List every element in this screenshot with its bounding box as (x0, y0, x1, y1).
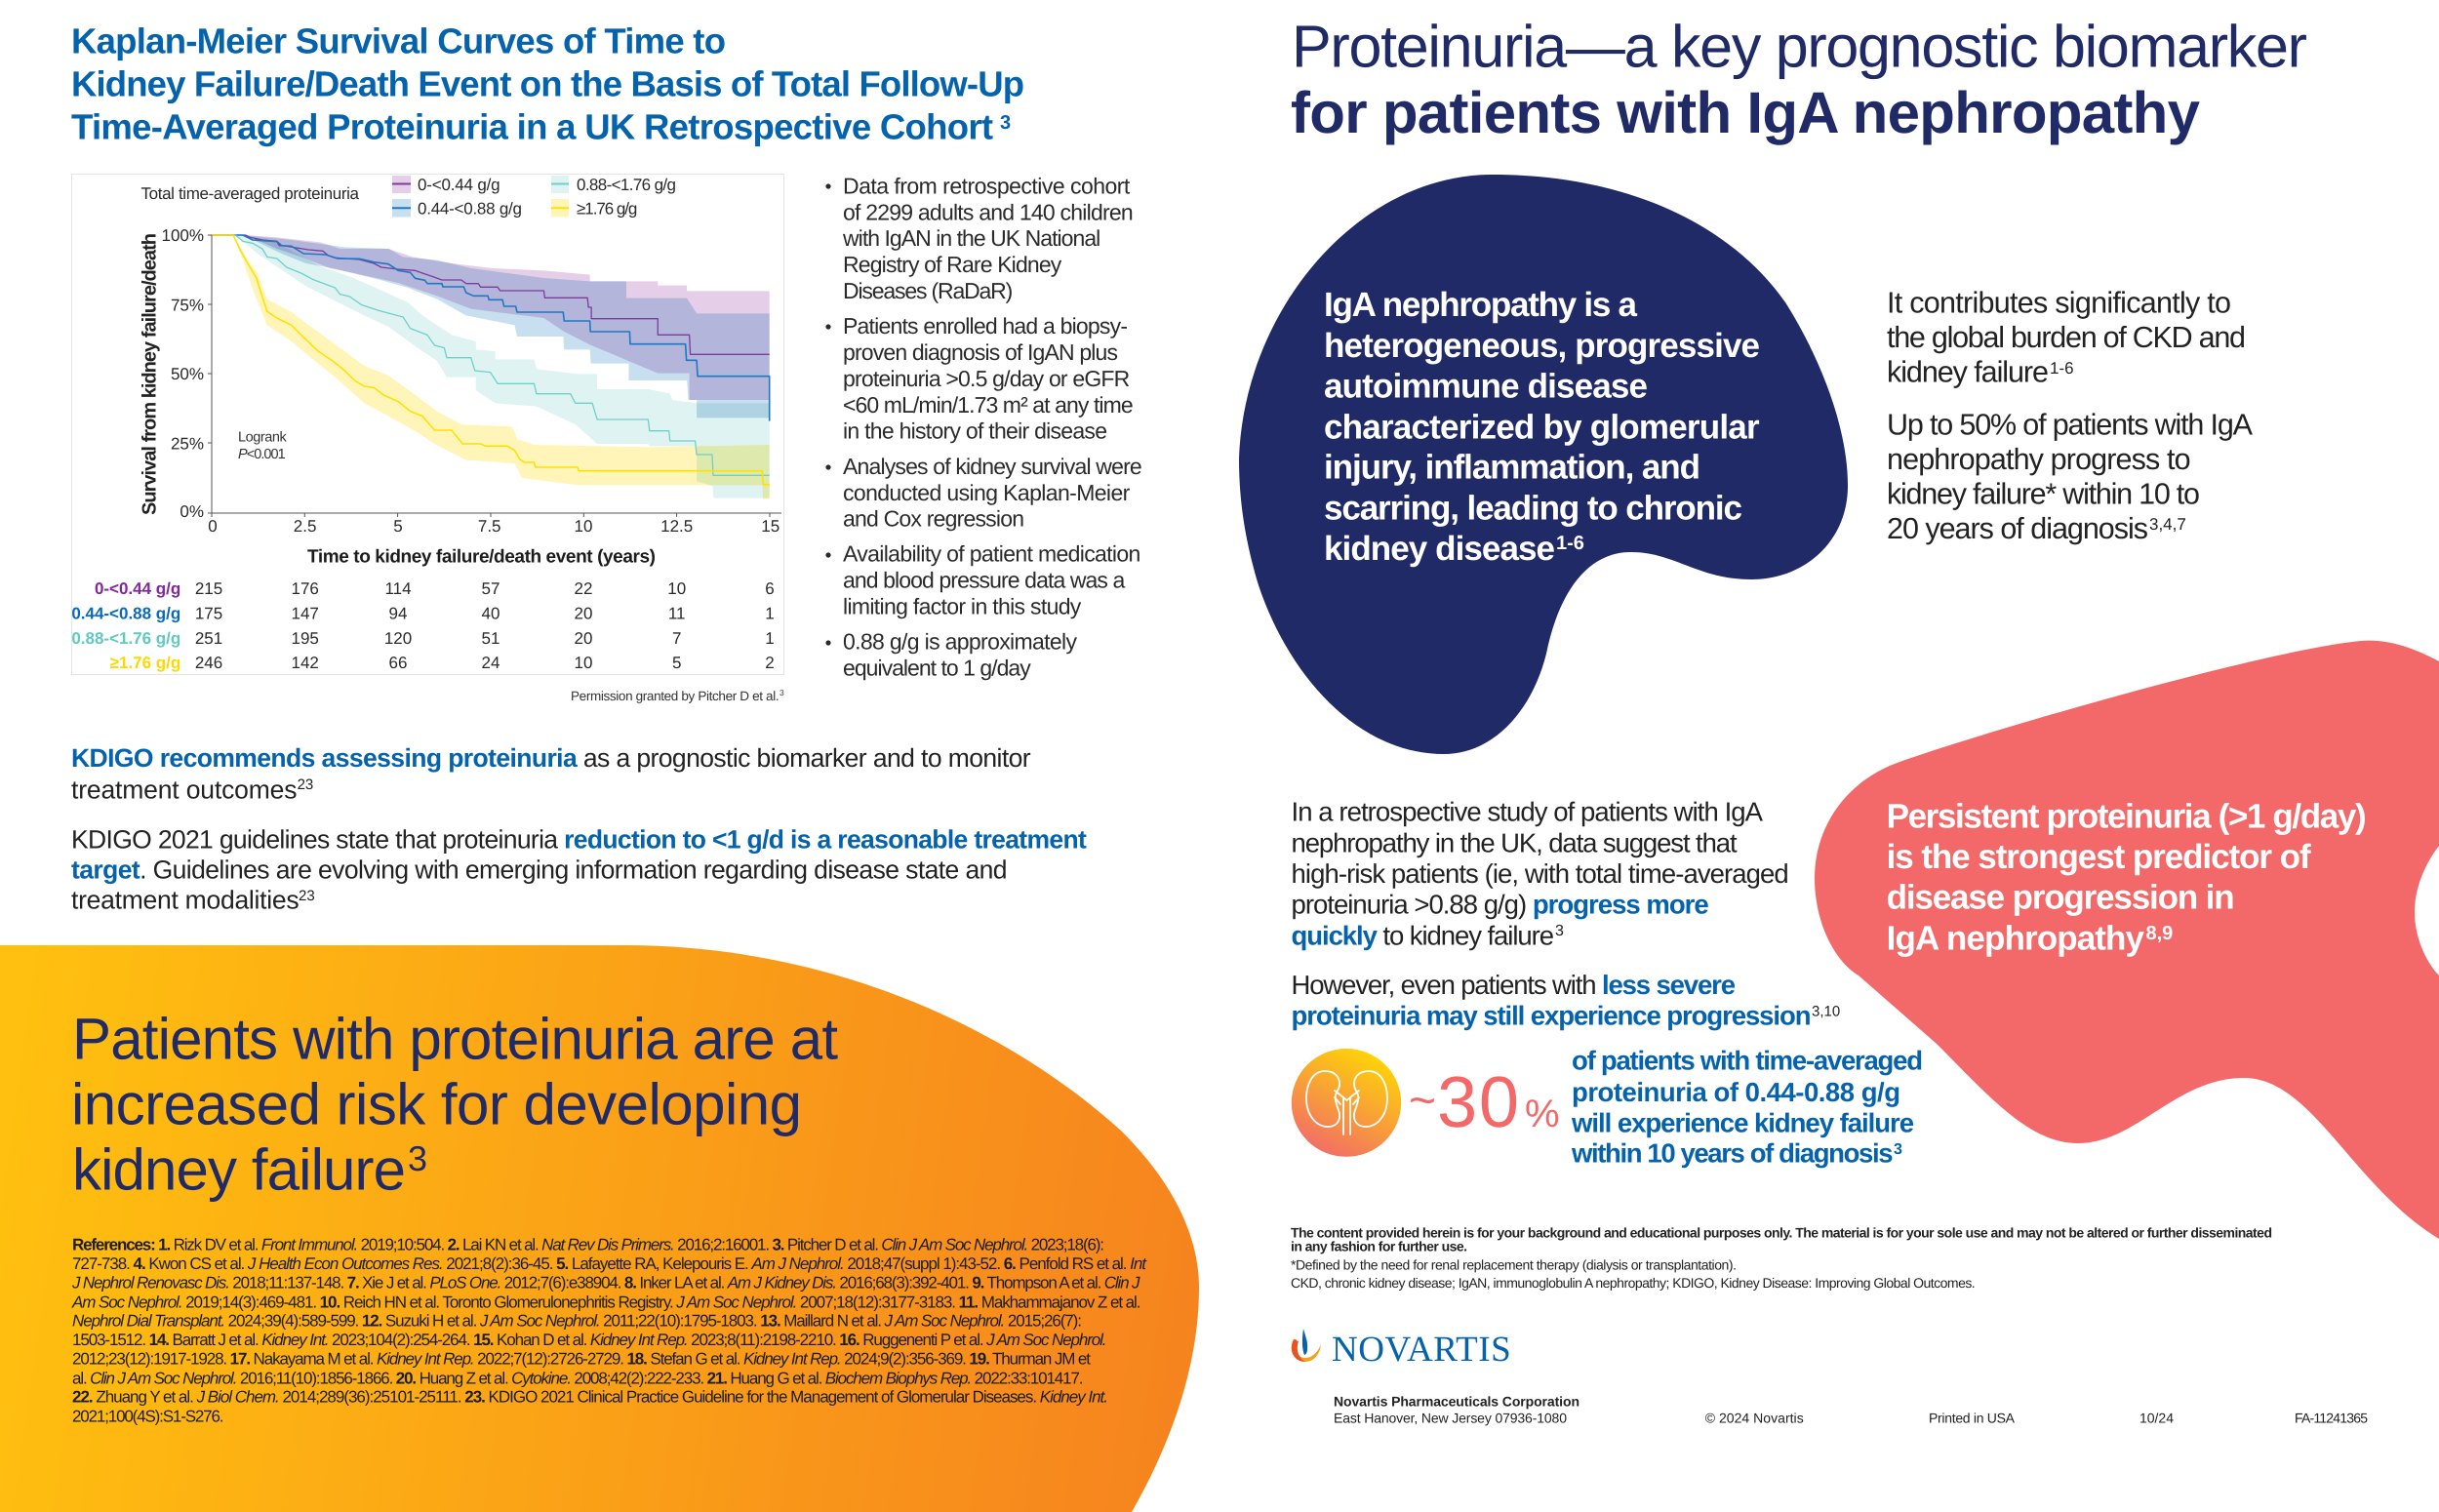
patients at risk table: 175 (195, 605, 222, 623)
patients at risk table: 114 (384, 579, 412, 598)
references: 727-738. 4. Kwon CS et al. J Health Econ Outcomes Res. 2021;8(2):36-45. 5. Lafayette RA, Kelepouris E. Am J Nephrol. 2018;47(suppl 1):43-52. 6. Penfold RS et al. Int (72, 1254, 1147, 1273)
text block: KDIGO recommendation: 23 (299, 888, 315, 904)
stat description: proteinuria of 0.44-0.88 g/g (1572, 1077, 1900, 1107)
bullet list: study details: Availability of patient medication (843, 540, 1140, 566)
stat description: of patients with time-averaged (1572, 1046, 1923, 1076)
references: 22. Zhuang Y et al. J Biol Chem. 2014;289(36):25101-25111. 23. KDIGO 2021 Clinical Practice Guideline for the Management of Glomerular Diseases. Kidney Int. (72, 1388, 1108, 1407)
logrank annotation: Logrank (238, 430, 287, 446)
footer imprint: East Hanover, New Jersey 07936-1080 (1334, 1410, 1567, 1425)
x-axis labels: 15 (761, 517, 780, 536)
text block: retrospective study (1292, 797, 1840, 1031)
stat description: will experience kidney failure (1571, 1108, 1914, 1138)
logo: Novartis: NOVARTIS (1332, 1330, 1511, 1370)
y-axis labels: 0% (180, 502, 204, 521)
patients at risk table: 0.88-<1.76 g/g (71, 629, 180, 648)
title: Kaplan-Meier chart heading: Kaplan-Meier Survival Curves of Time to (71, 20, 726, 60)
stat number (1409, 1061, 1560, 1142)
heading: patients with proteinuria (71, 1007, 838, 1202)
chart legend: 0.88-<1.76 g/g (577, 176, 676, 194)
callout: IgA nephropathy definition: injury, inflammation, and (1324, 449, 1700, 487)
text block: KDIGO recommendation: KDIGO 2021 guidelines state that proteinuria reduction to <1 g/d is a reasonable treatment (71, 824, 1087, 854)
permission note: Permission granted by Pitcher D et al. (571, 689, 780, 703)
references: References: 1. Rizk DV et al. Front Immunol. 2019;10:504. 2. Lai KN et al. Nat Rev Dis Primers. 2016;2:16001. 3. Pitcher D et al. Clin J Am Soc Nephrol. 2023;18(6): (72, 1236, 1104, 1254)
patients at risk table: 22 (575, 579, 592, 598)
curve: teal 0.88-<1.76 g/g (212, 235, 770, 475)
text block: retrospective study: proteinuria may still experience progression (1292, 1001, 1811, 1031)
survival curves plot (212, 235, 770, 499)
text block: retrospective study: 3 (1555, 923, 1564, 939)
text block: global burden: nephropathy progress to (1887, 443, 2191, 476)
curve: blue 0.44-<0.88 g/g (212, 235, 770, 421)
y-axis labels: 25% (171, 435, 204, 454)
disclaimer and footnotes (1291, 1224, 2272, 1291)
bullet list: study details: Data from retrospective cohort (843, 173, 1131, 198)
text block: global burden: It contributes significantly to (1887, 287, 2231, 320)
references: 1503-1512. 14. Barratt J et al. Kidney Int. 2023;104(2):254-264. 15. Kohan D et al. Kidney Int Rep. 2023;8(11):2198-2210. 16. Ruggenenti P et al. J Am Soc Nephrol. (72, 1331, 1106, 1349)
text block: KDIGO recommendation: KDIGO recommends assessing proteinuria as a prognostic biomarker and to monitor (71, 743, 1031, 773)
bullet list: study details: proteinuria >0.5 g/day or eGFR (843, 366, 1130, 391)
x-axis labels (208, 517, 780, 536)
heading: patients with proteinuria: Patients with proteinuria are at (72, 1007, 838, 1072)
patients at risk table: 20 (575, 605, 592, 623)
callout: IgA nephropathy definition: heterogeneous, progressive (1324, 327, 1760, 365)
patients at risk table: 246 (195, 654, 222, 672)
callout: persistent proteinuria: 8,9 (2146, 923, 2173, 944)
patients at risk table: 94 (389, 605, 407, 623)
patients at risk table: ≥1.76 g/g (110, 654, 180, 672)
stat: ~30% of patients (1292, 1046, 1923, 1169)
patients at risk table: 251 (195, 629, 222, 648)
patients at risk table: 11 (668, 605, 686, 623)
bullet list: study details: of 2299 adults and 140 children (843, 199, 1134, 224)
patients at risk table: 0.44-<0.88 g/g (71, 605, 180, 623)
stat number: 30 (1437, 1061, 1519, 1142)
title: Kaplan-Meier chart heading (71, 20, 1024, 147)
disclaimer and footnotes: CKD, chronic kidney disease; IgAN, immunoglobulin A nephropathy; KDIGO, Kidney Disease: Improving Global Outcomes. (1291, 1275, 1976, 1291)
chart legend: 0-<0.44 g/g (418, 176, 500, 194)
confidence band: teal (236, 235, 770, 498)
title: Proteinuria key prognostic biomarker: Proteinuria—a key prognostic biomarker (1292, 13, 2307, 79)
patients at risk table: 176 (292, 579, 319, 598)
patients at risk table: 2 (765, 654, 775, 672)
footer imprint (1334, 1394, 2368, 1425)
stat number: ~ (1409, 1075, 1436, 1127)
callout: IgA nephropathy definition: 1-6 (1556, 533, 1584, 554)
shape: orange background panel (0, 945, 1199, 1512)
title: Kaplan-Meier chart heading: Time-Averaged Proteinuria in a UK Retrospective Cohort (71, 107, 993, 147)
patients at risk table: 51 (482, 629, 500, 648)
x-axis labels: 5 (393, 517, 403, 536)
patients at risk table: 57 (482, 579, 500, 598)
title: Kaplan-Meier chart heading: 3 (1000, 112, 1011, 134)
bullet list: study details: Analyses of kidney survival were (843, 454, 1142, 479)
text block: retrospective study: quickly to kidney failure (1292, 920, 1554, 950)
patients at risk table: 1 (765, 605, 775, 623)
chart legend: 0.44-<0.88 g/g (418, 199, 522, 218)
bullet list: study details (825, 173, 1142, 680)
patients at risk table: 7 (672, 629, 681, 648)
icon: kidneys (1292, 1049, 1401, 1157)
logrank annotation: P<0.001 (238, 447, 286, 462)
callout: IgA nephropathy definition: characterized by glomerular (1324, 408, 1760, 446)
text block: global burden: kidney failure* within 10 to (1887, 478, 2200, 511)
disclaimer and footnotes: *Defined by the need for renal replacement therapy (dialysis or transplantation). (1291, 1257, 1737, 1273)
callout: persistent proteinuria: IgA nephropathy (1887, 919, 2145, 957)
text block: retrospective study: 3,10 (1812, 1004, 1840, 1020)
bullet list: study details: in the history of their disease (843, 418, 1107, 444)
callout: persistent proteinuria: Persistent proteinuria (>1 g/day) (1887, 797, 2367, 835)
patients at risk table (71, 579, 775, 672)
bullet list: study details: Registry of Rare Kidney (843, 252, 1062, 277)
curve: yellow ≥1.76 g/g (212, 235, 770, 485)
curve: purple 0-<0.44 g/g (212, 235, 770, 354)
patients at risk table: 6 (765, 579, 775, 598)
callout: IgA nephropathy definition: IgA nephropathy is a (1324, 286, 1638, 324)
text block: global burden (1887, 287, 2254, 545)
patients at risk table: 24 (482, 654, 500, 672)
patients at risk table: 10 (667, 579, 686, 598)
text block: retrospective study: proteinuria >0.88 g/g) progress more (1292, 890, 1709, 920)
shape: coral blob (1815, 641, 2439, 1239)
x-axis labels: 10 (575, 517, 592, 536)
footer imprint: © 2024 Novartis (1705, 1410, 1804, 1425)
text block: retrospective study: In a retrospective study of patients with IgA (1292, 797, 1764, 827)
bullet list: study details: with IgAN in the UK National (842, 225, 1100, 251)
text block: global burden: kidney failure (1887, 356, 2049, 389)
disclaimer and footnotes: in any fashion for further use. (1291, 1238, 1467, 1253)
x-axis labels: 12.5 (660, 517, 693, 536)
x-axis title: Time to kidney failure/death event (years) (307, 547, 656, 568)
text block: global burden: 3,4,7 (2149, 515, 2186, 534)
bullet list: study details: proven diagnosis of IgAN plus (843, 339, 1118, 365)
y-axis labels: 75% (171, 296, 204, 314)
text block: retrospective study: high-risk patients (ie, with total time-averaged (1292, 858, 1789, 889)
patients at risk table: 66 (389, 654, 407, 672)
footer imprint: FA-11241365 (2295, 1410, 2368, 1425)
callout: persistent proteinuria: is the strongest predictor of (1887, 838, 2311, 876)
logrank annotation (238, 430, 287, 462)
patients at risk table: 120 (384, 629, 412, 648)
references: Nephrol Dial Transplant. 2024;39(4):589-599. 12. Suzuki H et al. J Am Soc Nephrol. 2011;22(10):1795-1803. 13. Maillard N et al. J Am Soc Nephrol. 2015;26(7): (72, 1311, 1082, 1330)
y-axis labels (162, 226, 204, 521)
bullet list: study details: 0.88 g/g is approximately (843, 628, 1077, 654)
references: al. Clin J Am Soc Nephrol. 2016;11(10):1856-1866. 20. Huang Z et al. Cytokine. 2008;42(2):222-233. 21. Huang G et al. Biochem Biophys Rep. 2022:33:101417. (72, 1369, 1084, 1387)
footer imprint: 10/24 (2139, 1410, 2174, 1425)
text block: KDIGO recommendation: 23 (298, 776, 313, 793)
x-axis labels: 0 (208, 517, 218, 536)
disclaimer and footnotes: The content provided herein is for your background and educational purposes only. The material is for your sole use and may not be altered or further disseminated (1291, 1224, 2272, 1240)
callout: IgA nephropathy definition: kidney disease (1324, 530, 1555, 568)
patients at risk table: 0-<0.44 g/g (95, 579, 180, 598)
y-axis labels: 100% (162, 226, 204, 245)
stat description: within 10 years of diagnosis (1571, 1138, 1893, 1169)
heading: patients with proteinuria: 3 (408, 1138, 427, 1178)
bullet list: study details: Patients enrolled had a biopsy- (843, 313, 1128, 338)
bullet list: study details: <60 mL/min/1.73 m² at any time (843, 392, 1134, 418)
text block: global burden: 1-6 (2050, 359, 2074, 378)
references: 2021;100(4S):S1-S276. (72, 1407, 224, 1425)
patients at risk table: 10 (575, 654, 592, 672)
references: Am Soc Nephrol. 2019;14(3):469-481. 10. Reich HN et al. Toronto Glomerulonephritis Registry. J Am Soc Nephrol. 2007;18(12):3177-3183. 11. Makhammajanov Z et al. (71, 1293, 1141, 1311)
patients at risk table: 5 (672, 654, 681, 672)
stat description: 3 (1894, 1141, 1902, 1158)
text block: global burden: the global burden of CKD and (1887, 321, 2246, 354)
stat description (1571, 1046, 1923, 1169)
footer imprint: Printed in USA (1929, 1410, 2016, 1425)
heading: patients with proteinuria: increased risk for developing (71, 1072, 802, 1137)
callout: IgA nephropathy definition (1324, 286, 1760, 568)
x-axis labels: 7.5 (478, 517, 501, 536)
references: J Nephrol Renovasc Dis. 2018;11:137-148. 7. Xie J et al. PLoS One. 2012;7(6):e38904. 8. Inker LA et al. Am J Kidney Dis. 2016;68(3):392-401. 9. Thompson A et al. Clin J (71, 1274, 1140, 1293)
title: Kaplan-Meier chart heading: Kidney Failure/Death Event on the Basis of Total Follow-Up (71, 63, 1024, 103)
y-axis labels: 50% (171, 365, 204, 383)
permission note: 3 (780, 688, 784, 697)
confidence band: purple (245, 235, 770, 400)
panel: survival chart card (71, 174, 783, 675)
bullet list: study details: limiting factor in this study (843, 593, 1082, 618)
confidence band: yellow (233, 235, 770, 499)
text block: KDIGO recommendation: treatment outcomes (71, 775, 297, 804)
references (71, 1236, 1147, 1425)
callout: IgA nephropathy definition: autoimmune disease (1324, 368, 1648, 406)
x-axis labels: 2.5 (294, 517, 316, 536)
chart legend: ≥1.76 g/g (577, 199, 637, 218)
patients at risk table: 215 (195, 579, 222, 598)
confidence band: blue (243, 235, 770, 418)
chart legend (140, 176, 676, 218)
callout: persistent proteinuria: disease progression in (1887, 879, 2235, 917)
text block: KDIGO recommendation: target. Guidelines are evolving with emerging information regarding disease state and (71, 855, 1007, 885)
patients at risk table: 1 (765, 629, 775, 648)
bullet list: study details: Diseases (RaDaR) (843, 278, 1013, 303)
bullet list: study details: conducted using Kaplan-Meier (843, 480, 1131, 505)
text block: retrospective study: nephropathy in the UK, data suggest that (1292, 827, 1738, 857)
callout: IgA nephropathy definition: scarring, leading to chronic (1324, 489, 1742, 527)
stat number: % (1525, 1093, 1560, 1135)
text block: KDIGO recommendation: treatment modalities (71, 886, 300, 915)
text block: global burden: 20 years of diagnosis (1887, 512, 2148, 545)
title: Proteinuria key prognostic biomarker: for patients with IgA nephropathy (1291, 80, 2201, 145)
patients at risk table: 142 (292, 654, 319, 672)
patients at risk table: 147 (292, 605, 319, 623)
title: Proteinuria key prognostic biomarker (1291, 13, 2307, 145)
footer imprint: Novartis Pharmaceuticals Corporation (1334, 1394, 1579, 1410)
chart axes (208, 235, 781, 517)
text block: global burden: Up to 50% of patients with IgA (1887, 409, 2254, 442)
callout: persistent proteinuria (1887, 797, 2367, 957)
patients at risk table: 20 (575, 629, 592, 648)
y-axis title: Survival from kidney failure/death (139, 233, 160, 515)
patients at risk table: 195 (292, 629, 319, 648)
patients at risk table: 40 (482, 605, 500, 623)
bullet list: study details: and blood pressure data was a (843, 567, 1126, 592)
text block: retrospective study: However, even patients with less severe (1292, 970, 1736, 1000)
bullet list: study details: equivalent to 1 g/day (843, 655, 1031, 680)
heading: patients with proteinuria: kidney failure (72, 1136, 406, 1202)
bullet list: study details: and Cox regression (843, 506, 1024, 532)
text block: KDIGO recommendation (71, 743, 1087, 915)
references: 2012;23(12):1917-1928. 17. Nakayama M et al. Kidney Int Rep. 2022;7(12):2726-2729. 18. Stefan G et al. Kidney Int Rep. 2024;9(2):356-369. 19. Thurman JM et (72, 1350, 1091, 1369)
shape: navy blob (1239, 175, 1848, 754)
chart legend: Total time-averaged proteinuria (140, 184, 360, 203)
